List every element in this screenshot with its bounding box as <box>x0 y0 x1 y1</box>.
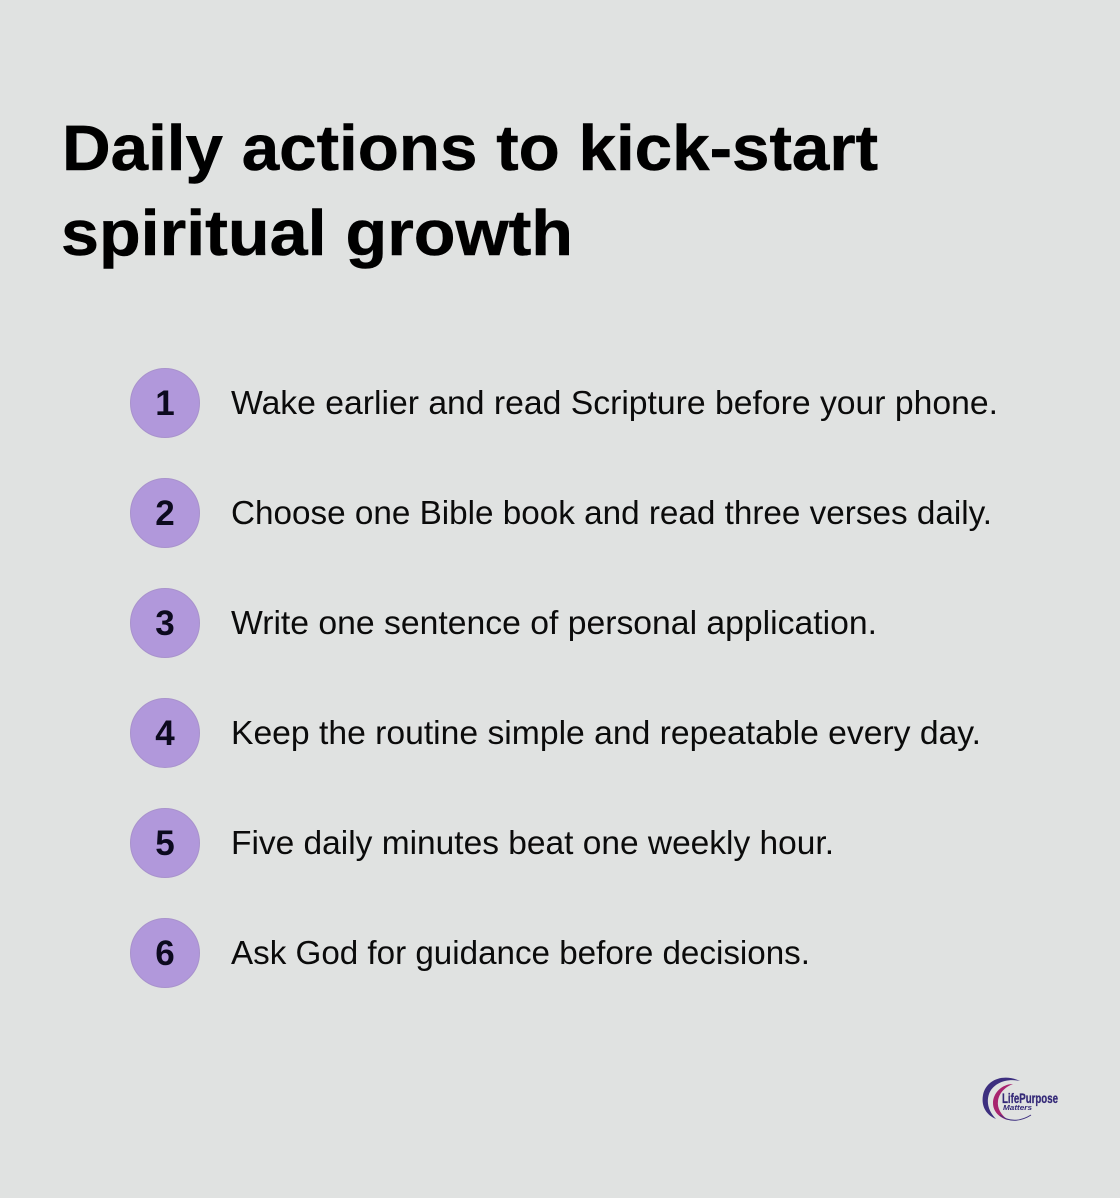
item 5: 5 <box>155 824 175 863</box>
item 6: Ask God for guidance before decisions. <box>231 934 810 971</box>
item 6: 6 <box>155 934 175 973</box>
item 2: Choose one Bible book and read three verses daily. <box>231 494 992 531</box>
item 4 <box>130 698 981 768</box>
item 4: Keep the routine simple and repeatable every day. <box>231 714 981 751</box>
item 1 <box>130 368 998 438</box>
item 3 <box>130 588 877 658</box>
list of daily actions <box>130 368 998 988</box>
item 5 <box>130 808 834 878</box>
item 6 <box>130 918 810 988</box>
title <box>61 112 878 269</box>
item 3: Write one sentence of personal application. <box>231 604 877 641</box>
item 3: 3 <box>155 604 175 643</box>
item 2 <box>130 478 992 548</box>
title: Daily actions to kick-start <box>62 112 878 184</box>
title: spiritual growth <box>61 197 573 269</box>
item 4: 4 <box>155 714 175 753</box>
logo: Life Purpose Matters: LifePurpose <box>1002 1091 1058 1106</box>
logo: Life Purpose Matters <box>983 1078 1058 1120</box>
item 1: Wake earlier and read Scripture before your phone. <box>231 384 998 421</box>
logo: Life Purpose Matters: Matters <box>1003 1105 1032 1112</box>
item 2: 2 <box>155 494 175 533</box>
item 5: Five daily minutes beat one weekly hour. <box>231 824 834 861</box>
item 1: 1 <box>155 384 175 423</box>
